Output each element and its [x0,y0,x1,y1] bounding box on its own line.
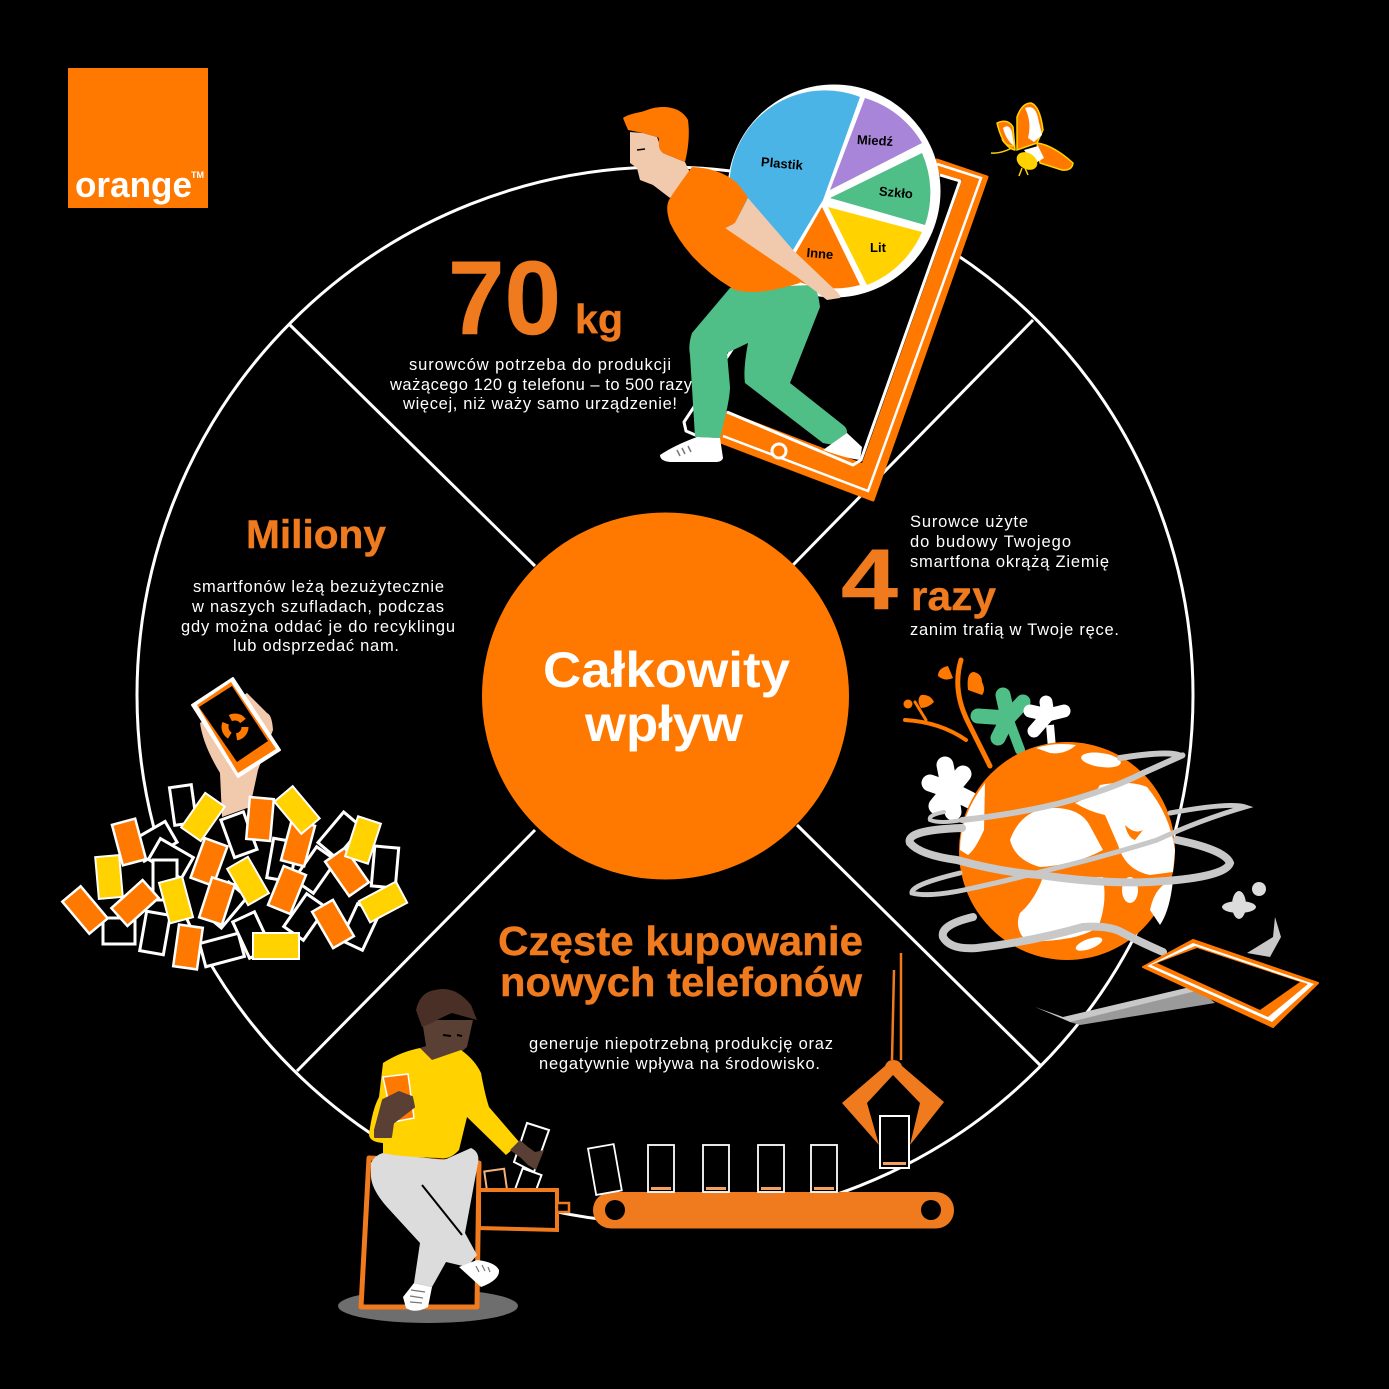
orange logo [68,68,208,208]
branches and flowers [904,660,1064,812]
orange phones [62,797,369,969]
yellow sweater [369,1048,520,1158]
centre circle: Całkowity wpływ: wpływ [584,696,743,752]
centre circle: Całkowity wpływ [482,512,849,880]
pie chart: raw materials: Inne [806,245,834,262]
plane with phone [1035,882,1318,1027]
ground shadow [338,1289,518,1323]
stat: 70 kg: 70 [448,240,561,357]
stat: Miliony [181,513,455,655]
small orange box [479,1190,569,1230]
yellow phones [95,786,407,959]
icon: butterfly [991,103,1073,176]
stat: 4 razy: Surowce użyte [910,513,1028,531]
illustration: conveyor belt with phones [588,953,954,1228]
text: 70 kg description [389,356,693,413]
text: 70 kg description: ważącego 120 g telefonu – to 500 razy [389,376,693,394]
pie chart: raw materials [728,84,940,298]
white outline phones [103,785,399,967]
phones in small box [484,1168,542,1198]
hand with recycling phone [192,678,280,817]
illustration: person on box [338,989,569,1323]
stat: Miliony: smartfonów leżą bezużytecznie [193,578,444,596]
right hand [510,1140,544,1170]
phone in right hand [514,1123,549,1172]
centre circle: Całkowity wpływ: Całkowity [543,642,790,698]
stat: Częste kupowanie nowych telefonów [498,918,863,1073]
illustration: globe with plane [904,660,1318,1027]
illustration: pile of phones [62,678,407,969]
left hand [375,1092,414,1137]
stat: Miliony: Miliony [246,513,387,557]
stat: Częste kupowanie nowych telefonów: negatywnie wpływa na środowisko. [539,1055,820,1073]
stat: 4 razy: 4 [841,532,898,628]
stat: 4 razy: do budowy Twojego [910,533,1071,551]
illustration: giant phone [683,160,987,500]
stat: 4 razy: smartfona okrążą Ziemię [910,553,1109,571]
pie chart: raw materials: Miedź [857,132,894,149]
pie chart: raw materials: Szkło [878,184,914,201]
phones on belt [588,1144,837,1195]
orange logo: TM [191,170,204,180]
stat: 4 razy: zanim trafią w Twoje ręce. [910,621,1119,639]
neck and head [416,989,477,1062]
globe [959,742,1175,960]
pie chart: raw materials: Plastik [760,154,804,173]
phone in left hand [383,1074,414,1122]
illustration: man carrying pie chart [623,107,862,462]
swirl rings [910,753,1245,952]
robotic claw [842,953,944,1168]
stat: 70 kg [448,240,623,357]
stat: 4 razy: razy [911,573,996,619]
stat: 4 razy [841,513,1119,639]
belt [593,1192,954,1228]
stat: Częste kupowanie nowych telefonów: nowych telefonów [500,959,862,1005]
orange box seat [361,1158,479,1307]
stat: Częste kupowanie nowych telefonów: generuje niepotrzebną produkcję oraz [529,1035,833,1053]
legs [371,1148,499,1311]
text: 70 kg description: więcej, niż waży samo urządzenie! [402,395,677,413]
stat: Miliony: w naszych szufladach, podczas [191,598,444,616]
pie chart: raw materials: Lit [870,240,887,255]
orange logo: orange [75,164,192,205]
stat: Częste kupowanie nowych telefonów: Częste kupowanie [498,918,863,964]
stat: 70 kg: kg [575,296,623,342]
stat: Miliony: lub odsprzedać nam. [233,637,399,655]
stat: Miliony: gdy można oddać je do recyklingu [181,618,455,636]
text: 70 kg description: surowców potrzeba do produkcji [409,356,671,374]
outer wheel with dividers [137,167,1193,1223]
